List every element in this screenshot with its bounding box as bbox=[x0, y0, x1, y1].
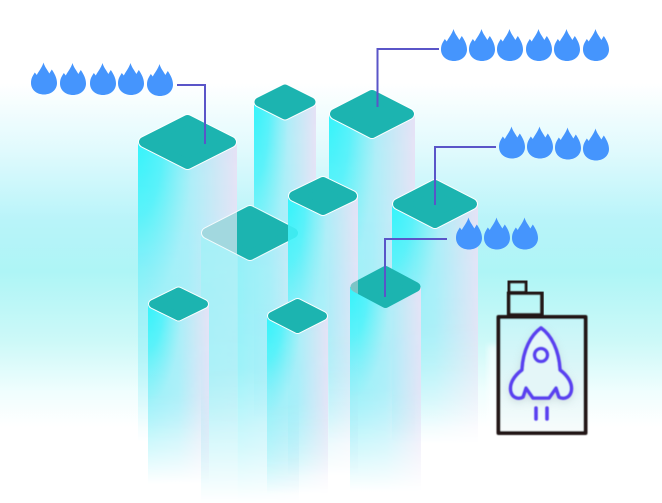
leader line: three flames to front right column bbox=[385, 239, 447, 297]
leader line: five flames to tall left column bbox=[177, 85, 205, 144]
icon: container neck bbox=[508, 293, 542, 315]
column: middle bbox=[288, 182, 358, 476]
icon: container cap bbox=[508, 282, 526, 293]
rating: four flames bbox=[499, 126, 609, 160]
column: front left bbox=[148, 292, 209, 484]
column: front right bbox=[350, 271, 421, 492]
rating: six flames bbox=[441, 29, 609, 61]
column: front centre bbox=[267, 303, 328, 494]
rating: five flames bbox=[31, 62, 173, 96]
column: back centre bbox=[254, 84, 316, 224]
icon: container body bbox=[498, 317, 586, 433]
column: back right bbox=[329, 95, 415, 444]
glass diamond tip over middle column bbox=[288, 225, 298, 241]
rating: three flames bbox=[456, 218, 538, 250]
leader line: six flames to back right column bbox=[378, 49, 439, 107]
column: translucent glass centre bbox=[201, 211, 299, 503]
column: tall left bbox=[138, 120, 237, 442]
leader line: four flames to right column bbox=[435, 147, 496, 205]
column: right bbox=[392, 185, 478, 444]
icon: rocket glow bbox=[511, 331, 571, 401]
icon: rocket bbox=[511, 328, 571, 419]
icon: rocket in a container bbox=[488, 282, 586, 433]
